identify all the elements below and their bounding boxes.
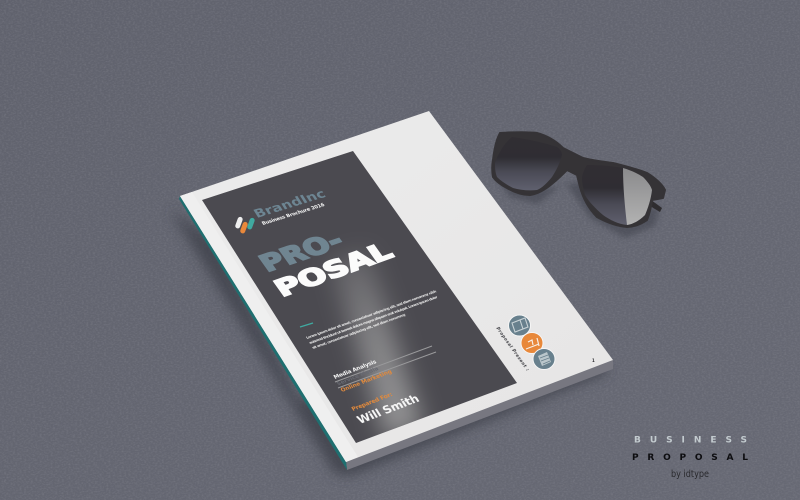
prepared for label: Prepared For: xyxy=(351,392,394,413)
page stack thickness xyxy=(346,360,613,470)
Media Analysis label: Media Analysis xyxy=(333,359,379,381)
left lens xyxy=(495,137,562,190)
right lens xyxy=(582,165,652,225)
frame xyxy=(492,132,665,227)
vertical side title: Proposal Present : xyxy=(495,326,531,372)
brochure drop shadow xyxy=(170,210,610,476)
light reflection xyxy=(330,250,424,440)
brand name: BrandInc xyxy=(251,186,328,221)
lens glare xyxy=(623,168,652,225)
Online Marketing label: Online Marketing xyxy=(340,369,393,394)
recipient name: Will Smith xyxy=(354,392,422,427)
icon: document circle xyxy=(533,348,555,370)
headline PRO-: PRO- xyxy=(254,227,349,277)
page number: 1 xyxy=(592,358,595,363)
service list xyxy=(333,346,436,394)
intro paragraph: Lorem ipsum dolor sit amet, consectetuer adipiscing elit, sed diam nonummy nibh xyxy=(305,289,438,340)
teal spine xyxy=(179,196,347,470)
icon: orange growth circle xyxy=(521,332,543,354)
sunglasses shadow xyxy=(490,170,660,238)
dark cover panel xyxy=(202,151,517,443)
icon: chart circle xyxy=(508,315,530,336)
caption line: BUSINESS: BUSINESS xyxy=(634,436,747,446)
Service Media label: Service Media xyxy=(336,366,380,387)
logo mark xyxy=(235,216,255,234)
white fold strip xyxy=(180,192,358,462)
sunglasses xyxy=(490,132,665,238)
divider lines xyxy=(335,346,436,388)
brochure xyxy=(179,111,613,470)
caption xyxy=(632,436,748,480)
caption line: PROPOSAL: PROPOSAL xyxy=(632,453,748,463)
temple arm xyxy=(645,197,662,212)
cover text group xyxy=(235,186,439,427)
teal accent dash xyxy=(300,323,313,327)
cover page xyxy=(180,111,613,462)
intro paragraph: sit amet, consectetuer adipiscing elit, sed diam nonummy xyxy=(311,313,407,350)
headline POSAL: POSAL xyxy=(269,237,398,302)
caption line: by idtype: by idtype xyxy=(671,469,709,480)
intro paragraph: euismod tincidunt ut laoreet dolore magna aliquam erat volutpat. Lorem ipsum dolor xyxy=(308,295,439,345)
brochure subtitle: Business Brochure 2016 xyxy=(261,202,327,227)
